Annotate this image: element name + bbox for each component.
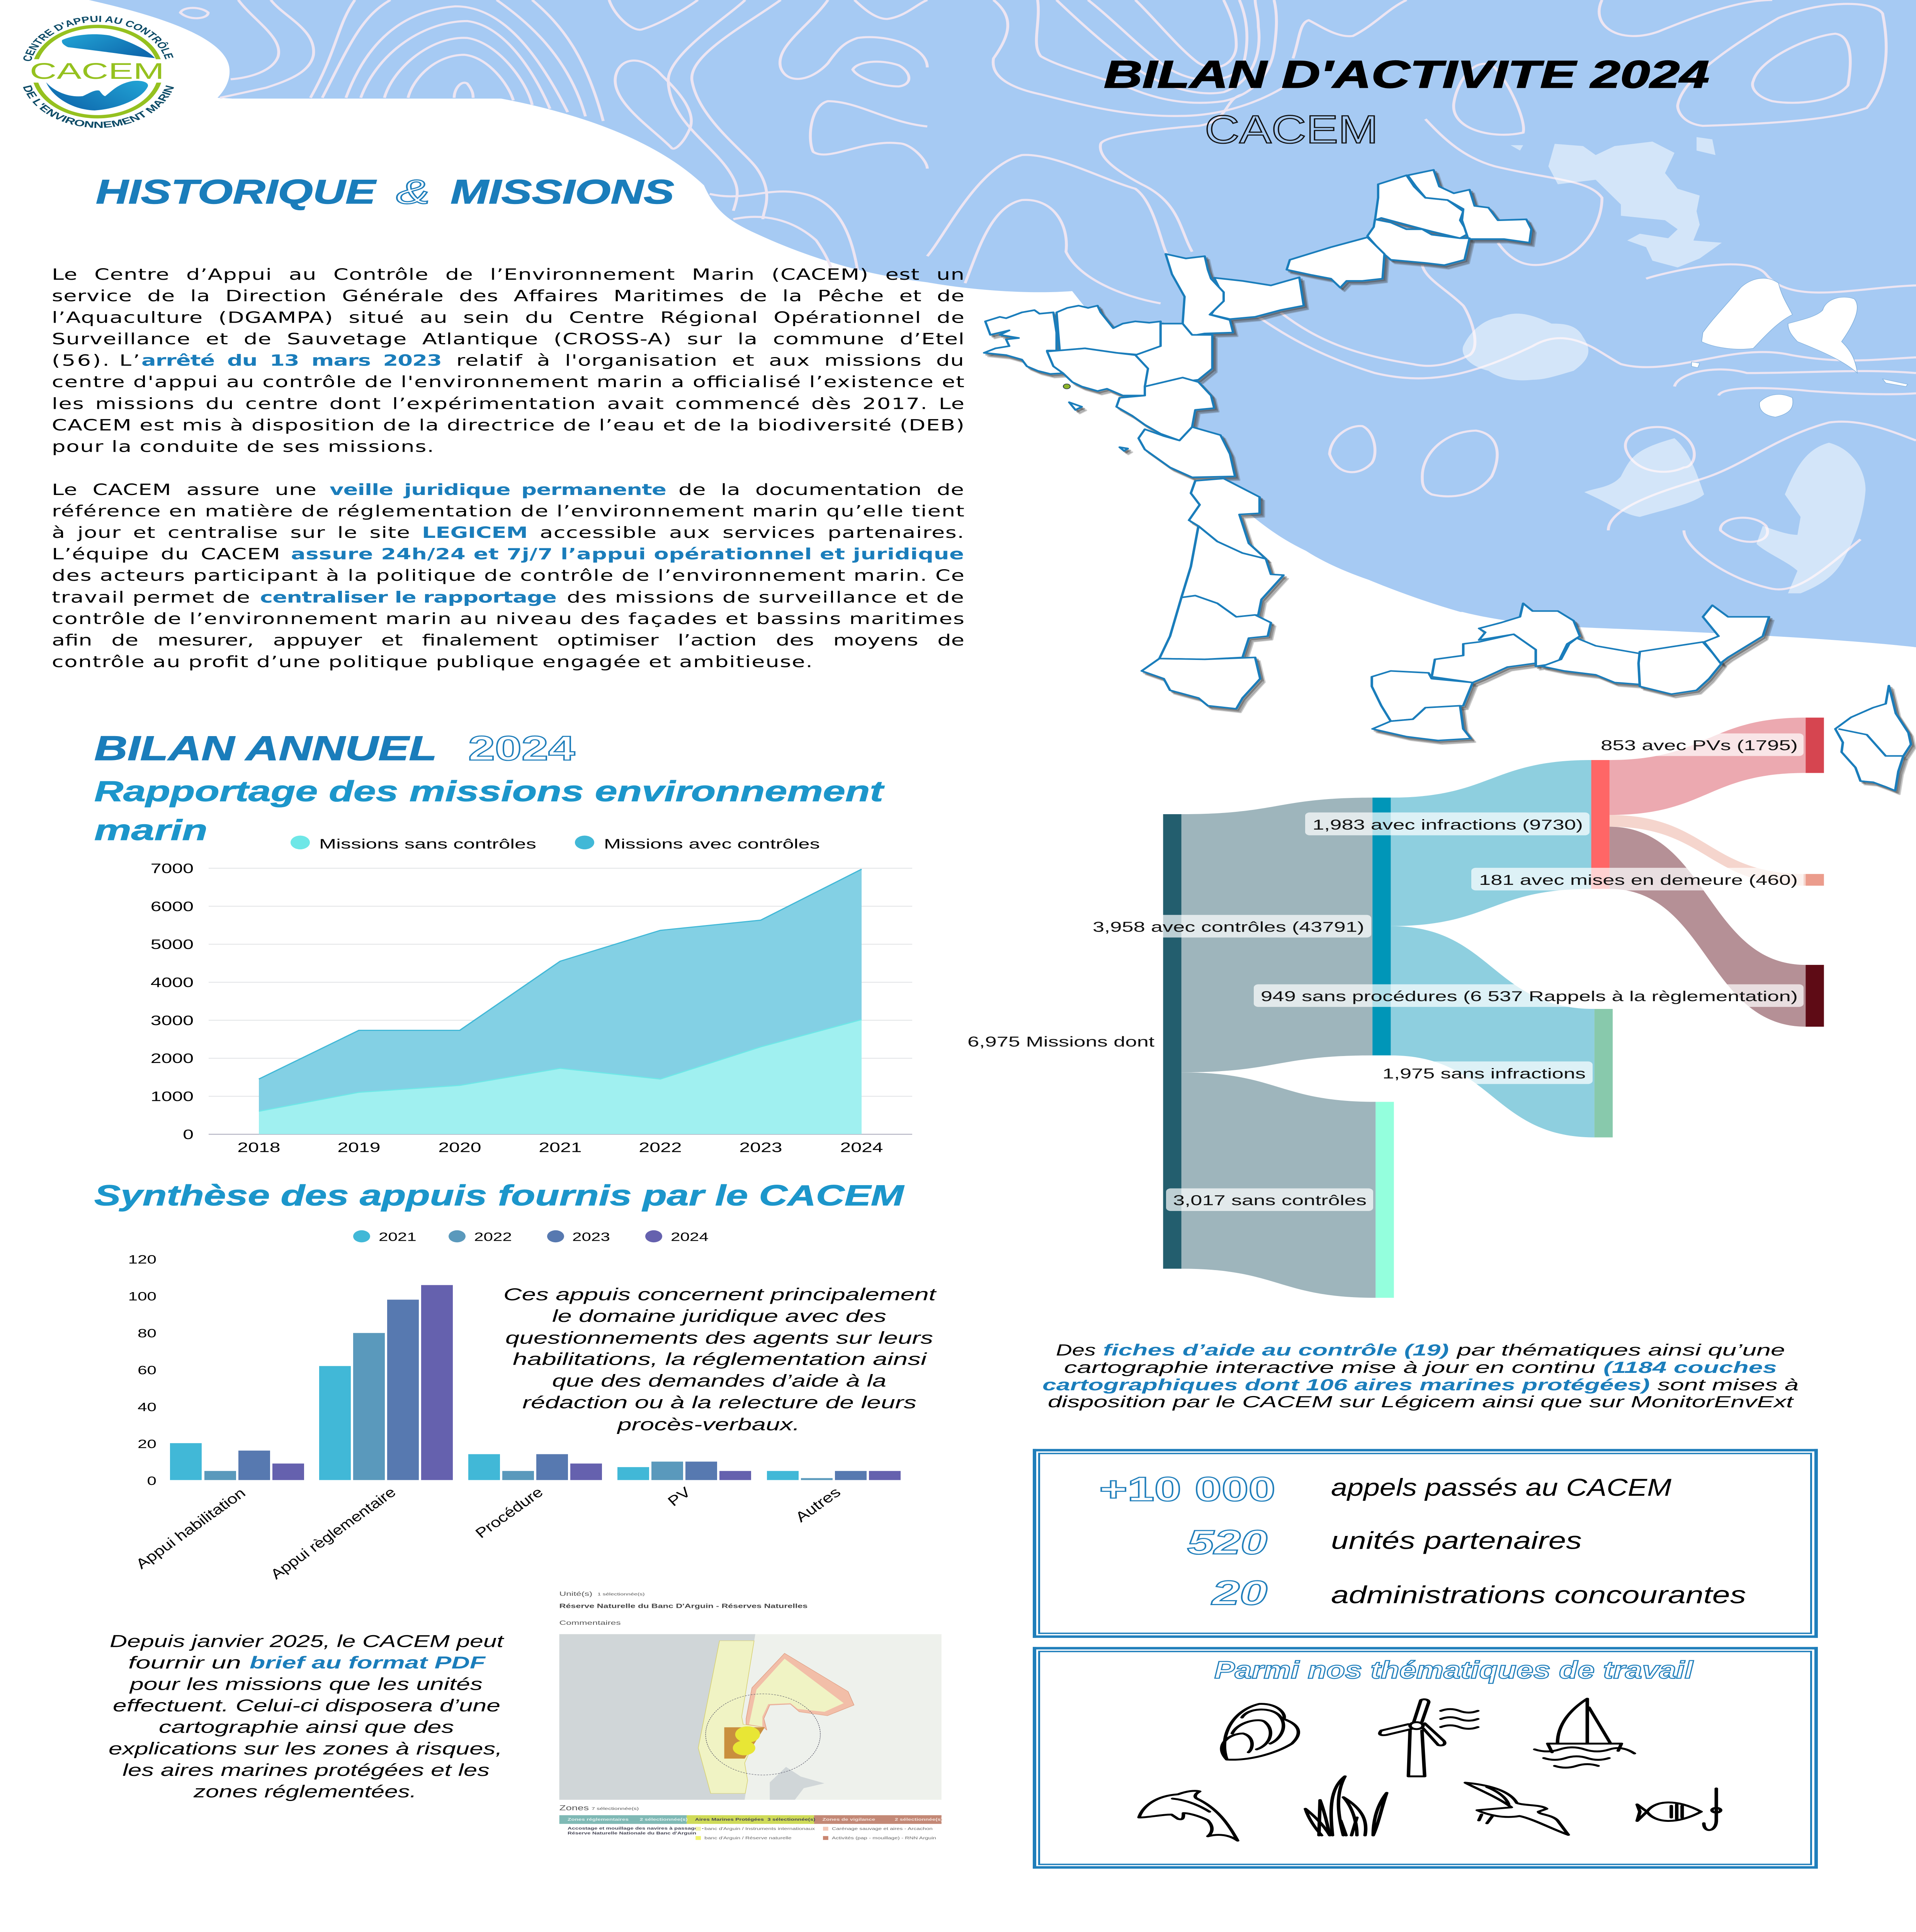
- text block: missions paragraph: veille juridique permanente: [330, 481, 666, 499]
- x axis labels: 2019: [337, 1140, 381, 1155]
- text block: fiches et cartographie: cartographie interactive mise à jour en continu: [1064, 1358, 1595, 1376]
- heading: historique et missions: &: [396, 173, 430, 211]
- brief zones table: 7 sélectionnée(s): [592, 1806, 639, 1811]
- area chart legend: Missions avec contrôles: [604, 837, 820, 852]
- text block: appuis explanation: que des demandes d’aide à la: [552, 1371, 886, 1391]
- text block: missions paragraph: afin de mesurer, appuyer et finalement optimiser l’action des moyens de: [52, 632, 964, 650]
- figure: calls: appels passés au CACEM: [1331, 1474, 1671, 1501]
- y axis labels: 6000: [151, 899, 194, 914]
- sankey links and nodes: [1163, 718, 1824, 1298]
- text block: fiches et cartographie: fiches d’aide au contrôle (19): [1103, 1341, 1449, 1359]
- y axis labels: 0: [183, 1127, 194, 1142]
- brief zones table: Zones réglementaires: [568, 1817, 629, 1822]
- text block: fiches et cartographie: cartographiques dont 106 aires marines protégées): [1042, 1376, 1650, 1394]
- heading: synthese des appuis: Synthèse des appuis fournis par le CACEM: [94, 1179, 905, 1212]
- icon: wind turbine: [1380, 1699, 1478, 1776]
- bar chart y axis: 60: [138, 1364, 156, 1377]
- map marker: Etel: [1063, 384, 1070, 389]
- y axis labels: [151, 861, 194, 1142]
- x axis labels: [237, 1140, 883, 1155]
- brief headers: Unité(s): [559, 1590, 592, 1597]
- text block: appuis explanation: [503, 1284, 937, 1434]
- y axis labels: 7000: [151, 861, 194, 876]
- heading: rapportage: [94, 775, 885, 846]
- text block: history paragraph: arrêté du 13 mars 2023: [141, 352, 442, 369]
- text block: brief PDF: zones réglementées.: [193, 1781, 417, 1801]
- bar chart x labels: Appui règlementaire: [265, 1485, 400, 1582]
- bar chart y axis: 120: [128, 1253, 156, 1267]
- text block: appuis explanation: questionnements des agents sur leurs: [505, 1328, 933, 1347]
- text block: history paragraph: service de la Direction Générale des Affaires Maritimes de la Pêche et de: [52, 287, 964, 305]
- bar chart legend: [353, 1230, 709, 1244]
- background: contour lines right: [927, 0, 1916, 589]
- icon: fish and hook: [1637, 1789, 1720, 1830]
- sankey labels: 949 sans procédures (6 537 Rappels à la règlementation): [1261, 988, 1798, 1004]
- text block: history paragraph: les missions du centre dont l’expérimentation avait commencé dès 2017. Le: [52, 395, 964, 413]
- area chart legend: [291, 836, 820, 852]
- x axis labels: 2018: [237, 1140, 281, 1155]
- icon: mussel: [1222, 1704, 1298, 1760]
- heading: historique et missions: MISSIONS: [451, 173, 674, 211]
- text block: history paragraph: CACEM est mis à disposition de la directrice de l’eau et de la biodiversité (DEB): [52, 417, 964, 434]
- text block: missions paragraph: contrôle de l’environnement marin au niveau des façades et bassins maritimes: [52, 610, 964, 628]
- brief headers: Commentaires: [559, 1619, 621, 1626]
- y axis labels: 2000: [151, 1051, 194, 1066]
- logo hands: [46, 34, 155, 111]
- subtitle CACEM outlined: CACEM: [1205, 108, 1378, 151]
- brief zones table: [559, 1804, 943, 1840]
- text block: brief PDF: les aires marines protégées et les: [122, 1760, 490, 1780]
- x axis labels: 2024: [840, 1140, 883, 1155]
- figure: units: unités partenaires: [1331, 1527, 1582, 1554]
- brief zones table: 2 sélectionnée(s): [640, 1817, 688, 1822]
- brief zones table: Accostage et mouillage des navires à passager -: [568, 1826, 704, 1831]
- text block: missions paragraph: LEGICEM: [422, 524, 528, 542]
- bar chart y axis: 80: [138, 1327, 156, 1340]
- text block: brief PDF: cartographie ainsi que des: [159, 1717, 454, 1737]
- icon: seabird: [1465, 1783, 1568, 1835]
- bar chart y axis: 20: [138, 1437, 156, 1451]
- bar chart x labels: Procédure: [471, 1485, 547, 1540]
- bar chart x labels: Autres: [790, 1485, 845, 1525]
- sankey labels: 853 avec PVs (1795): [1601, 737, 1798, 753]
- y axis labels: 4000: [151, 975, 194, 990]
- bar chart y axis: 0: [147, 1474, 156, 1488]
- x axis labels: 2023: [739, 1140, 782, 1155]
- text block: brief PDF: [109, 1631, 505, 1801]
- text block: history paragraph: relatif à l'organisation et aux missions du: [456, 352, 964, 369]
- text block: brief PDF: explications sur les zones à risques,: [109, 1738, 502, 1758]
- screenshot: brief PDF example map: [559, 1590, 943, 1840]
- text block: fiches et cartographie: Des: [1056, 1341, 1096, 1359]
- bars 2024: [272, 1285, 901, 1480]
- text block: missions paragraph: [52, 481, 964, 671]
- y axis labels: 1000: [151, 1089, 194, 1104]
- text block: missions paragraph: à jour et centralise sur le site: [52, 524, 410, 542]
- logo CACEM: [20, 14, 177, 130]
- figure: units: [1187, 1523, 1582, 1561]
- text block: missions paragraph: Le CACEM assure une: [52, 481, 316, 499]
- panel: thematics: [1033, 1647, 1818, 1869]
- text block: history paragraph: pour la conduite de ses missions.: [52, 438, 434, 456]
- heading: bilan annuel 2024: 2024: [468, 730, 575, 768]
- text block: history paragraph: (56). L’: [52, 352, 140, 369]
- area: missions sans controles: [259, 1020, 862, 1134]
- sankey labels: 3,017 sans contrôles: [1173, 1192, 1367, 1208]
- text block: fiches et cartographie: (1184 couches: [1603, 1358, 1777, 1376]
- y axis labels: 5000: [151, 937, 194, 952]
- heading: historique et missions: [96, 173, 674, 211]
- map: metropolitan coastal regions: [984, 170, 1915, 794]
- text block: history paragraph: centre d'appui au contrôle de l'environnement marin a officialisé l’existence et: [52, 373, 964, 391]
- sankey labels: 6,975 Missions dont: [967, 1034, 1155, 1050]
- bar chart y axis: 40: [138, 1400, 156, 1414]
- sankey labels: 181 avec mises en demeure (460): [1479, 872, 1798, 888]
- heading: rapportage: marin: [94, 814, 207, 846]
- bar chart y axis: 100: [128, 1290, 156, 1303]
- brief zones table: Zones de vigilance: [822, 1817, 875, 1822]
- sankey label boxes: [1085, 733, 1804, 1211]
- bar chart legend: 2021: [379, 1230, 417, 1244]
- text block: missions paragraph: travail permet de: [52, 588, 250, 606]
- bar chart y axis: [128, 1253, 156, 1488]
- bar chart x labels: [130, 1485, 845, 1582]
- text block: missions paragraph: accessible aux services partenaires.: [540, 524, 964, 542]
- text block: missions paragraph: contrôle au profit d’une politique publique engagée et ambitieuse.: [52, 653, 813, 671]
- text block: fiches et cartographie: sont mises à: [1658, 1376, 1799, 1394]
- logo name: CACEM: [30, 59, 164, 84]
- text block: missions paragraph: L’équipe du CACEM: [52, 545, 280, 563]
- heading: historique et missions: HISTORIQUE: [96, 173, 377, 211]
- text block: history paragraph: Le Centre d’Appui au Contrôle de l’Environnement Marin (CACEM) est un: [52, 266, 964, 284]
- text block: history paragraph: l’Aquaculture (DGAMPA) situé au sein du Centre Régional Opérationnel de: [52, 309, 964, 327]
- x axis labels: 2022: [639, 1140, 682, 1155]
- text block: fiches et cartographie: [1042, 1341, 1799, 1411]
- text block: brief PDF: fournir un: [128, 1653, 241, 1672]
- figure: calls: [1099, 1470, 1671, 1508]
- brief zones table: 3 sélectionnée(s): [767, 1817, 815, 1822]
- brief zones table: 2 sélectionnée(s): [895, 1817, 943, 1822]
- x axis labels: 2020: [438, 1140, 481, 1155]
- bar chart: appuis: [128, 1230, 901, 1582]
- text block: fiches et cartographie: par thématiques ainsi qu’une: [1456, 1341, 1785, 1359]
- text block: appuis explanation: le domaine juridique avec des: [552, 1306, 886, 1326]
- area chart legend: Missions sans contrôles: [319, 837, 536, 852]
- bar chart x labels: Appui habilitation: [130, 1486, 250, 1571]
- text block: history paragraph: [52, 266, 964, 456]
- text block: missions paragraph: des missions de surveillance et de: [567, 588, 964, 606]
- bars 2023: [238, 1300, 867, 1480]
- bars 2021: [170, 1366, 799, 1480]
- text block: fiches et cartographie: disposition par le CACEM sur Légicem ainsi que sur MonitorEnvExt: [1048, 1393, 1794, 1411]
- text block: brief PDF: Depuis janvier 2025, le CACEM peut: [110, 1631, 505, 1651]
- panel: key figures: [1033, 1449, 1818, 1638]
- icon: dolphin: [1139, 1791, 1238, 1841]
- bar chart legend: 2023: [572, 1230, 610, 1244]
- sankey labels: 1,975 sans infractions: [1382, 1066, 1586, 1082]
- text block: brief PDF: effectuent. Celui-ci disposera d’une: [113, 1696, 500, 1715]
- brief headers: 1 sélectionnée(s): [597, 1592, 645, 1597]
- brief zones table: Zones: [559, 1804, 589, 1812]
- brief zones table: banc d'Arguin / Réserve naturelle: [704, 1836, 792, 1840]
- brief zones table: Réserve Naturelle Nationale du Banc d'Arguin: [568, 1831, 696, 1835]
- background: blue sea area: [89, 0, 1916, 647]
- background: contour lines left: [180, 0, 927, 270]
- figure: calls: +10 000: [1099, 1470, 1275, 1508]
- brief zones table: Aires Marines Protégées: [695, 1817, 764, 1822]
- area chart: missions: [151, 836, 912, 1155]
- y axis labels: 3000: [151, 1013, 194, 1028]
- logo arc top: CENTRE D'APPUI AU CONTRÔLE: [20, 14, 176, 63]
- brief zones table: Carénage sauvage et aires - Arcachon: [832, 1827, 933, 1831]
- text block: brief PDF: pour les missions que les unités: [129, 1674, 483, 1694]
- figure: administrations: administrations concourantes: [1331, 1582, 1746, 1609]
- figure: units: 520: [1187, 1523, 1267, 1561]
- brief zones table: Activités (pap - mouillage) - RNN Arguin: [832, 1836, 936, 1840]
- sankey labels: 3,958 avec contrôles (43791): [1093, 919, 1364, 935]
- brief map: [559, 1634, 942, 1800]
- icon: seagrass: [1306, 1776, 1387, 1835]
- heading: rapportage: Rapportage des missions environnement: [94, 775, 885, 808]
- figure: administrations: [1211, 1574, 1746, 1612]
- text block: missions paragraph: de la documentation de: [678, 481, 964, 499]
- text block: appuis explanation: rédaction ou à la relecture de leurs: [522, 1392, 916, 1412]
- logo arc bottom: DE L'ENVIRONNEMENT MARIN: [20, 84, 177, 130]
- x axis labels: 2021: [539, 1140, 582, 1155]
- text block: appuis explanation: Ces appuis concernent principalement: [503, 1284, 937, 1304]
- text block: brief PDF: brief au format PDF: [250, 1653, 486, 1672]
- translucent overseas territories: [1463, 137, 1865, 593]
- heading: bilan annuel 2024: BILAN ANNUEL: [94, 730, 437, 768]
- brief headers: Réserve Naturelle du Banc D'Arguin - Réserves Naturelles: [559, 1603, 808, 1610]
- title: BILAN D'ACTIVITE 2024: [1104, 53, 1709, 96]
- logo ring: [34, 26, 161, 117]
- sankey labels: [967, 737, 1798, 1208]
- brief zones table: banc d'Arguin / Instruments internationaux: [704, 1827, 815, 1831]
- text block: history paragraph: Surveillance et de Sauvetage Atlantique (CROSS-A) sur la commune d’Etel: [52, 330, 964, 348]
- thematics heading: Parmi nos thématiques de travail: [1214, 1657, 1694, 1684]
- text block: missions paragraph: assure 24h/24 et 7j/7 l’appui opérationnel et juridique: [291, 545, 964, 563]
- icon: sailboat: [1535, 1699, 1634, 1768]
- bar chart x labels: PV: [663, 1485, 696, 1509]
- text block: missions paragraph: référence en matière de réglementation de l’environnement marin qu’elle tient: [52, 502, 964, 520]
- bar chart legend: 2024: [671, 1230, 709, 1244]
- sankey diagram: [967, 718, 1824, 1298]
- bars 2022: [204, 1333, 833, 1480]
- sankey labels: 1,983 avec infractions (9730): [1312, 816, 1583, 833]
- figure: administrations: 20: [1211, 1574, 1267, 1612]
- text block: missions paragraph: centraliser le rapportage: [260, 588, 557, 606]
- text block: appuis explanation: habilitations, la réglementation ainsi: [513, 1349, 927, 1369]
- white overseas islands: [1692, 278, 1908, 417]
- text block: missions paragraph: des acteurs participant à la politique de contrôle de l’environnement marin. Ce: [52, 567, 964, 585]
- bar chart legend: 2022: [474, 1230, 512, 1244]
- text block: appuis explanation: procès-verbaux.: [617, 1414, 800, 1434]
- area: missions avec controles: [259, 869, 862, 1111]
- brief headers: [559, 1590, 808, 1626]
